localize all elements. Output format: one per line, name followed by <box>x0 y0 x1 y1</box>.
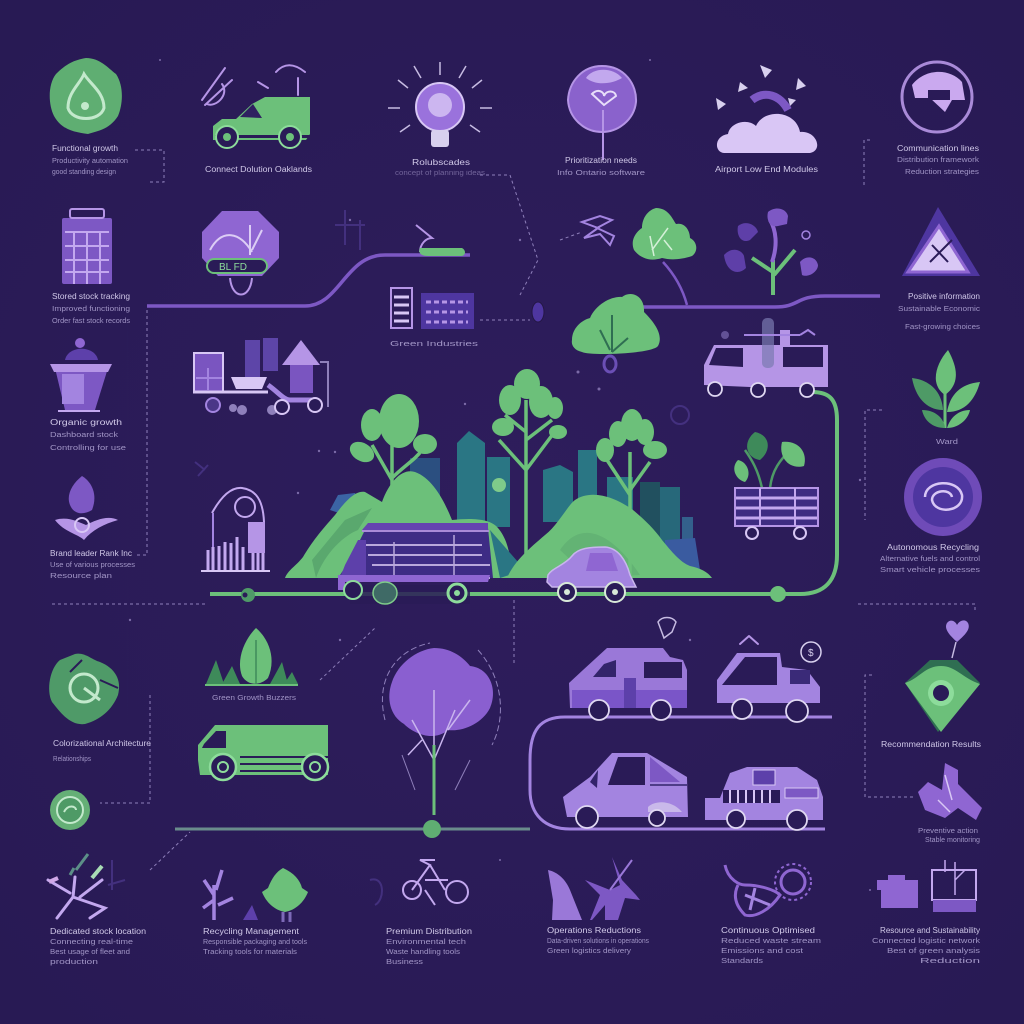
text: origami caption: Operations Reductions <box>547 926 641 935</box>
icon: small crossed glyph <box>582 216 614 245</box>
text: flower caption <box>50 549 136 580</box>
icon: gears <box>725 864 811 916</box>
text: figure caption: Stable monitoring <box>925 837 980 844</box>
icon: plug on route <box>416 225 465 256</box>
text: gears caption <box>721 926 821 965</box>
text: panel caption: Green Industries <box>390 341 479 348</box>
faint ghost glyphs <box>108 210 689 905</box>
purple route upper left <box>147 255 470 306</box>
text: pot caption: Dashboard stock <box>50 432 119 439</box>
text: rack caption: Order fast stock records <box>52 318 131 325</box>
text: rack caption <box>52 292 131 325</box>
text: meadow caption: Green Growth Buzzers <box>212 695 297 702</box>
text: bicycle caption: Waste handling tools <box>386 949 461 956</box>
text: figure caption: Preventive action <box>918 828 978 835</box>
bottom route <box>175 828 530 830</box>
text: branching caption: production <box>50 959 98 966</box>
icon: green leaf blob with ring <box>49 654 119 724</box>
text: van caption: Connect Dolution Oaklands <box>205 165 312 174</box>
chart: gauge with bars <box>201 488 270 571</box>
text: disc caption: Alternative fuels and control <box>880 556 981 563</box>
icon: branching glyph <box>48 854 105 918</box>
text: balloon caption: Prioritization needs <box>565 156 637 165</box>
icon: purple bus lower right <box>705 767 823 830</box>
text: flower caption: Resource plan <box>50 573 112 580</box>
tree three <box>596 409 667 575</box>
icon: plant truck <box>734 432 818 539</box>
text: gears caption: Emissions and cost <box>721 948 803 955</box>
text: badge caption: Reduction strategies <box>905 169 980 176</box>
text: pot caption <box>50 418 126 452</box>
icon: purple cooking pot <box>50 338 112 411</box>
text: bulb caption <box>395 158 486 177</box>
text: origami caption <box>547 926 649 955</box>
icon: purple figure <box>918 763 982 820</box>
icon: green blob seed <box>50 58 122 134</box>
text: puzzle caption: Connected logistic network <box>872 938 981 945</box>
central scene: trees, hills, truck and car <box>285 369 712 604</box>
text: balloon caption <box>557 156 645 177</box>
icon: purple rack building <box>62 209 112 284</box>
icon: purple pickup truck upper <box>717 636 821 722</box>
icon: purple hexagon with plate: BL FD <box>219 262 247 273</box>
text: plant pair caption: Recycling Management <box>203 927 300 936</box>
icon: purple pickup truck upper: $ <box>808 648 814 659</box>
icon: purple balloon <box>568 66 636 160</box>
icon: puzzle and cart <box>877 860 976 908</box>
text: disc caption: Autonomous Recycling <box>887 543 979 552</box>
icon: line art bicycle <box>403 860 468 905</box>
text: blob seed caption: Productivity automation <box>52 158 128 165</box>
text: bicycle caption: Business <box>386 959 424 966</box>
right hills <box>507 495 712 578</box>
skyline <box>330 431 700 570</box>
connector dashed lines <box>52 140 975 870</box>
text: bicycle caption: Environmental tech <box>386 939 466 946</box>
route nodes <box>241 586 786 838</box>
text: origami caption: Data-driven solutions in operations <box>547 938 649 945</box>
text: blob seed caption <box>52 144 128 176</box>
icon: purple tree <box>382 643 500 815</box>
small car <box>547 547 636 602</box>
text: blob seed caption: good standing design <box>52 169 116 176</box>
icon: large leaf meadow <box>205 628 298 685</box>
text: triangle caption: Fast-growing choices <box>905 324 981 331</box>
text: diamond caption: Recommendation Results <box>881 740 981 749</box>
icon: purple hexagon with plate <box>202 211 279 294</box>
text: balloon caption: Info Ontario software <box>557 170 645 177</box>
left hills <box>285 471 511 578</box>
tree one <box>346 394 437 525</box>
text: cloud caption: Airport Low End Modules <box>715 165 818 174</box>
icon: green tree <box>633 208 696 305</box>
text: branching caption: Dedicated stock location <box>50 927 146 936</box>
icon: purple swirl disc <box>904 458 982 536</box>
icon: purple van upper <box>569 618 687 720</box>
text: branching caption <box>50 927 146 966</box>
text: bicycle caption: Premium Distribution <box>386 927 472 936</box>
text: figure caption <box>918 828 980 844</box>
text: leaf blob caption <box>53 739 152 763</box>
icon: green diamond with heart <box>905 620 980 732</box>
tree two <box>492 369 567 575</box>
icon: purple plant and green leaf <box>203 868 308 922</box>
text: triangle caption: Positive information <box>908 292 980 301</box>
text: leaf blob caption: Relationships <box>53 756 91 763</box>
icon: large green van <box>198 725 330 780</box>
text: plant pair caption <box>203 927 307 956</box>
text: badge caption <box>897 144 980 176</box>
icon: cloud with birds <box>716 65 817 153</box>
text: pot caption: Controlling for use <box>50 445 126 452</box>
text: flower caption: Use of various processes <box>50 562 136 569</box>
text: origami caption: Green logistics delivery <box>547 948 632 955</box>
text: puzzle caption: Best of green analysis <box>887 948 981 955</box>
text: leaf blob caption: Colorizational Architecture <box>53 739 152 748</box>
text: puzzle caption: Resource and Sustainability <box>880 926 980 935</box>
text: plant pair caption: Tracking tools for materials <box>203 949 298 956</box>
text: flower caption: Brand leader Rank Inc <box>50 549 132 558</box>
icon: purple flower <box>55 476 118 540</box>
purple route upper right <box>640 296 880 307</box>
icon: purple flowers <box>724 209 818 295</box>
text: badge caption: Distribution framework <box>897 157 980 164</box>
text: plant caption: Ward <box>936 439 958 446</box>
icon: green cloud tree <box>572 294 660 372</box>
text: rack caption: Stored stock tracking <box>52 292 130 301</box>
text: blob seed caption: Functional growth <box>52 144 118 153</box>
icon: small document panel <box>391 288 474 329</box>
green route <box>210 392 837 594</box>
text: bulb caption: Rolubscades <box>412 158 470 167</box>
icon: purple house cluster <box>193 338 328 415</box>
text: gears caption: Continuous Optimised <box>721 926 815 935</box>
text: gears caption: Standards <box>721 958 764 965</box>
icon: purple origami plants <box>548 857 640 920</box>
text: triangle caption <box>898 292 981 331</box>
text: puzzle caption: Reduction <box>920 958 980 965</box>
icon: circular outline badge <box>902 62 972 132</box>
icon: light bulb <box>388 62 492 147</box>
icon: purple delivery truck <box>704 318 828 397</box>
icon: green small coin <box>50 790 90 830</box>
text: gears caption: Reduced waste stream <box>721 938 821 945</box>
text: plant pair caption: Responsible packaging and tools <box>203 939 307 946</box>
background specks <box>129 59 871 891</box>
text: rack caption: Improved functioning <box>52 306 130 313</box>
text: pot caption: Organic growth <box>50 418 122 427</box>
icon: green leaf plant <box>912 350 980 428</box>
text: branching caption: Connecting real-time <box>50 939 133 946</box>
purple route lower <box>530 717 832 829</box>
text: triangle caption: Sustainable Economic <box>898 306 981 313</box>
icon: small mouse marker <box>532 302 544 322</box>
icon: green delivery van <box>202 65 310 148</box>
text: disc caption: Smart vehicle processes <box>880 567 981 574</box>
text: bicycle caption <box>386 927 472 966</box>
text: puzzle caption <box>872 926 981 965</box>
text: badge caption: Communication lines <box>897 144 979 153</box>
box truck <box>338 523 493 604</box>
text: bulb caption: concept of planning ideas <box>395 170 486 177</box>
text: branching caption: Best usage of fleet and <box>50 949 130 956</box>
icon: warning triangle <box>902 207 980 276</box>
icon: purple car lower left <box>563 753 688 828</box>
text: disc caption <box>880 543 981 574</box>
